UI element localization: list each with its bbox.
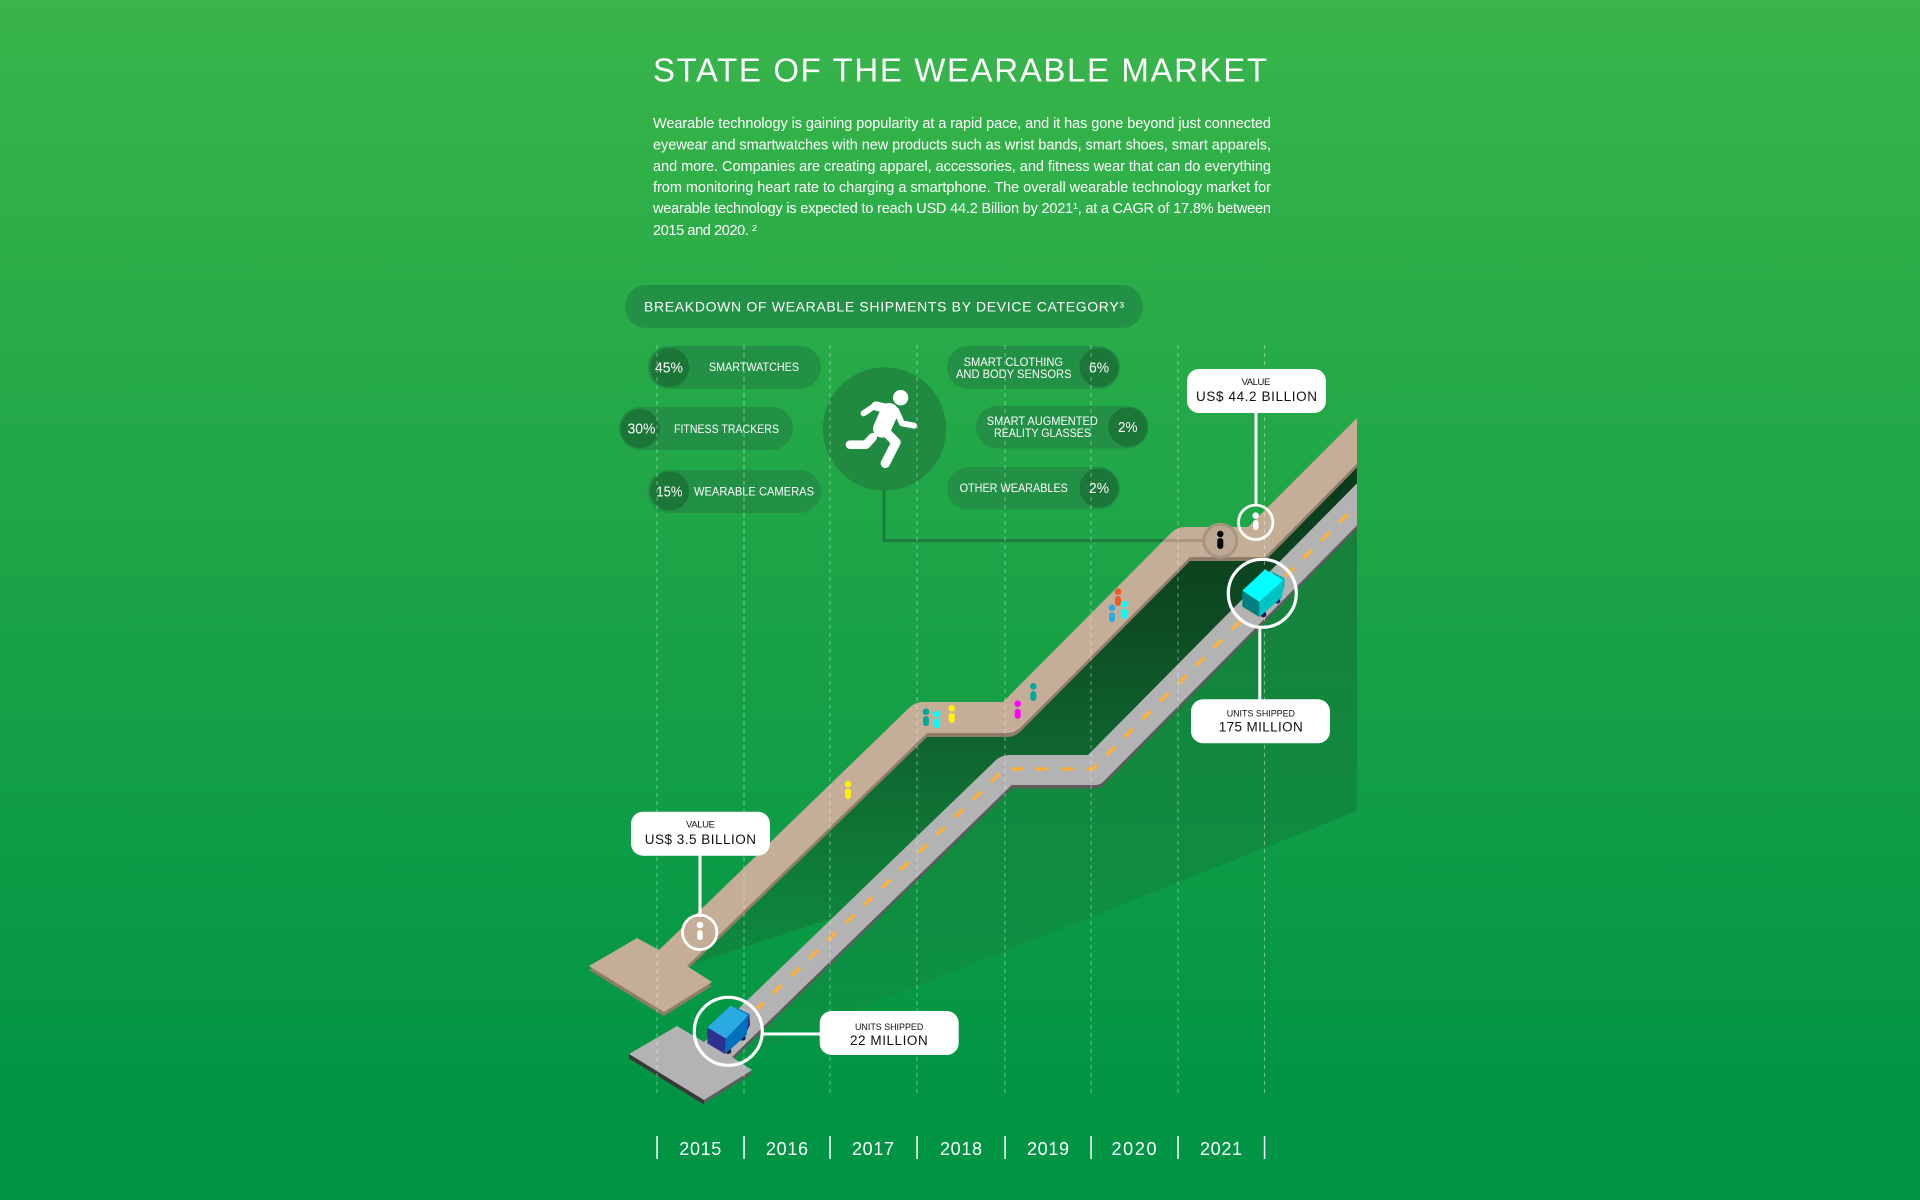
heading pill: breakdown of shipments (625, 285, 1143, 328)
pill: other wearables 2%: OTHER WEARABLES (960, 481, 1068, 495)
vertical year grid lines (657, 345, 1264, 1095)
callout: value 44.2 billion (1187, 369, 1326, 540)
pill: smartwatches 45%: SMARTWATCHES (709, 360, 799, 374)
intro paragraph (652, 116, 1271, 239)
shadow under value road (687, 460, 1357, 966)
year axis: 2016 (766, 1139, 808, 1159)
callout: units shipped 175 million: 175 MILLION (1219, 720, 1303, 735)
pill: smart clothing and body sensors 6%: AND BODY SENSORS (956, 367, 1072, 381)
callout: value 3.5 billion: US$ 3.5 BILLION (645, 832, 756, 847)
connector from runner circle to road marker (884, 490, 1164, 540)
shadow under units road (736, 515, 1357, 1058)
pill: smart augmented reality glasses 2%: 2% (1118, 419, 1138, 436)
callout: units shipped 175 million (1191, 559, 1330, 743)
icon: cyan truck (1242, 569, 1284, 617)
callout: units shipped 22 million: UNITS SHIPPED (855, 1022, 923, 1033)
year axis: 2021 (1200, 1139, 1242, 1159)
pill: wearable cameras 15% (648, 470, 821, 513)
year axis (656, 1136, 1265, 1159)
pill: other wearables 2%: 2% (1089, 480, 1109, 497)
pill: smart augmented reality glasses 2%: REALITY GLASSES (994, 426, 1091, 440)
pill: smart augmented reality glasses 2% (976, 406, 1149, 448)
intro paragraph: Wearable technology is gaining popularity at a rapid pace, and it has gone beyond just connected (653, 116, 1271, 132)
pill: smartwatches 45%: 45% (655, 360, 683, 377)
intro paragraph: wearable technology is expected to reach USD 44.2 Billion by 2021¹, at a CAGR of 17.8% between (652, 201, 1271, 217)
year axis: 2020 (1112, 1139, 1156, 1159)
pill: smartwatches 45% (648, 346, 821, 389)
pill: smart augmented reality glasses 2%: SMART AUGMENTED (987, 414, 1098, 428)
heading pill: breakdown of shipments: BREAKDOWN OF WEARABLE SHIPMENTS BY DEVICE CATEGORY³ (644, 299, 1124, 315)
icon: runner (850, 390, 914, 463)
value road (tan) (589, 418, 1357, 1016)
callout: units shipped 22 million (694, 997, 959, 1065)
year axis: 2018 (940, 1139, 982, 1159)
pill: fitness trackers 30%: 30% (628, 420, 656, 438)
units road (gray) (629, 484, 1357, 1104)
intro paragraph: and more. Companies are creating apparel, accessories, and fitness wear that can do everything (653, 159, 1271, 175)
callout: value 3.5 billion (631, 812, 770, 950)
callout: units shipped 22 million: 22 MILLION (850, 1033, 928, 1048)
intro paragraph: eyewear and smartwatches with new products such as wrist bands, smart shoes, smart apparels, (653, 137, 1271, 153)
title: STATE OF THE WEARABLE MARKET (653, 52, 1267, 88)
central circle behind runner (823, 367, 946, 491)
pill: other wearables 2% (947, 467, 1120, 510)
pill: wearable cameras 15%: WEARABLE CAMERAS (694, 485, 814, 499)
callout: value 3.5 billion: VALUE (686, 820, 715, 831)
pill: smart clothing and body sensors 6%: 6% (1089, 360, 1109, 377)
pill: fitness trackers 30% (619, 407, 793, 450)
callout: value 44.2 billion: US$ 44.2 BILLION (1196, 389, 1317, 404)
pill: smart clothing and body sensors 6% (947, 346, 1120, 389)
marker: black person at road end of connector (1204, 524, 1237, 557)
intro paragraph: from monitoring heart rate to charging a smartphone. The overall wearable technology market for (653, 180, 1271, 196)
year axis: 2017 (852, 1139, 894, 1159)
pill: smart clothing and body sensors 6%: SMART CLOTHING (964, 355, 1063, 369)
pill: fitness trackers 30%: FITNESS TRACKERS (674, 422, 779, 436)
icon: blue truck (707, 1006, 750, 1054)
callout: units shipped 175 million: UNITS SHIPPED (1227, 709, 1295, 720)
year axis: 2019 (1027, 1139, 1069, 1159)
pill: wearable cameras 15%: 15% (656, 483, 682, 500)
connector segment over road (1164, 539, 1205, 542)
callout: value 44.2 billion: VALUE (1242, 377, 1270, 388)
year axis: 2015 (679, 1139, 721, 1159)
people on road (845, 588, 1128, 799)
intro paragraph: 2015 and 2020. ² (653, 223, 757, 239)
